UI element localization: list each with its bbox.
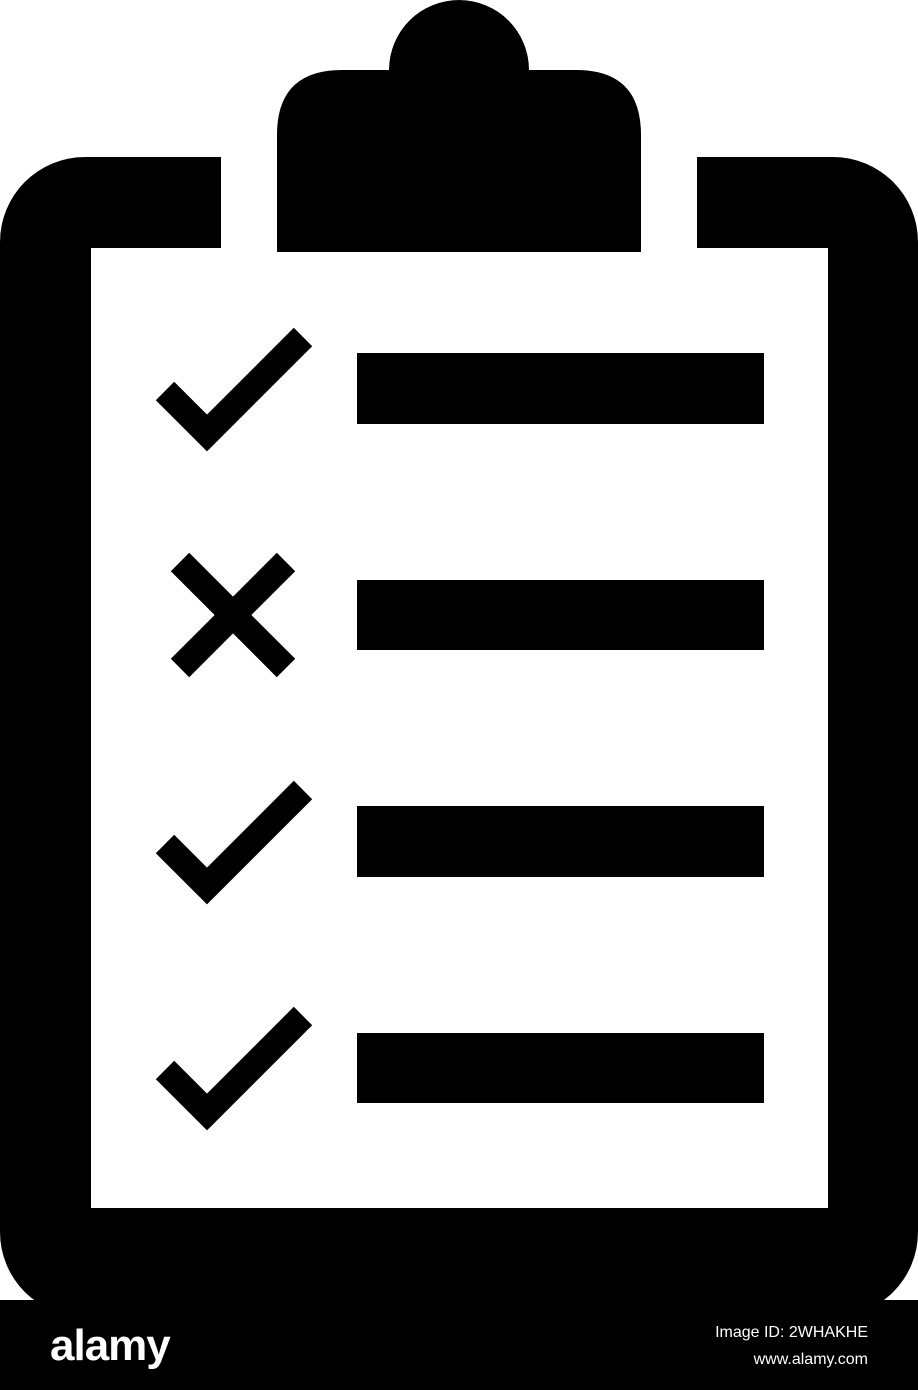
footer image id: Image ID: 2WHAKHE: [715, 1324, 868, 1341]
footer logo: alamy: [50, 1321, 171, 1370]
footer bar: [0, 1300, 918, 1390]
clip: [277, 0, 641, 252]
checklist row 2: cross: [180, 562, 764, 668]
checklist row 1: check: [165, 337, 764, 433]
checklist row 4: check: [165, 1016, 764, 1112]
checklist row 3: check: [165, 790, 764, 886]
footer url: www.alamy.com: [753, 1351, 868, 1368]
